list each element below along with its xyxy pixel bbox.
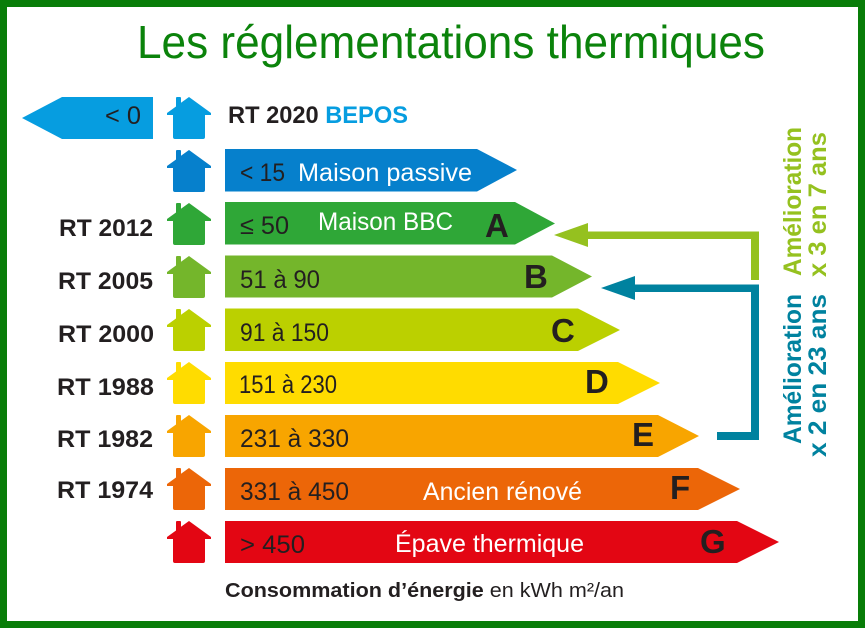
letter E: E [632,416,654,453]
row: class F [57,468,740,510]
value: 151 to 230: 151 à 230 [239,371,337,399]
row: class A [59,202,555,245]
label: RT 2000: RT 2000 [58,321,154,348]
icon: house E [167,415,211,457]
icon: house G [167,521,211,563]
icon: house D [167,362,211,404]
bar: maison passive [225,149,517,192]
text: improvement x3: x 3 en 7 ans [804,132,832,277]
arrow: teal improvement [601,276,759,440]
letter D: D [585,363,609,400]
title: Les réglementations thermiques [137,16,765,68]
value: 51 to 90: 51 à 90 [240,266,320,294]
icon: house RT 2020 [167,97,211,139]
icon: house B [167,256,211,298]
label: RT 2005: RT 2005 [58,268,153,295]
letter G: G [700,523,726,560]
arrow: green improvement [554,223,759,280]
bar: G [225,521,779,563]
icon: house passive [167,150,211,192]
value: above 450: > 450 [240,531,305,559]
label: épave thermique: Épave thermique [395,529,584,558]
label: RT 1988: RT 1988 [57,374,154,401]
arrow: below 0: < 0 [105,102,141,130]
label: RT 2012: RT 2012 [59,215,153,242]
bar: A [225,202,555,244]
label: maison BBC: Maison BBC [318,208,453,236]
bar: F [225,468,740,510]
text: improvement x2: Amélioration [779,294,807,444]
bar: D [225,362,660,404]
bar: E [225,415,699,457]
text: improvement x2: x 2 en 23 ans [804,294,832,457]
label: RT 1974: RT 1974 [57,477,154,504]
label: ancien rénové: Ancien rénové [423,478,582,506]
row: class G [167,521,779,563]
text: improvement x3: Amélioration [779,127,807,276]
row: maison passive [167,149,517,192]
bar: B [225,256,592,298]
icon: house F [167,468,211,510]
letter C: C [551,312,575,349]
row: class C [58,308,620,351]
row: class D [57,362,660,404]
icon: house A [167,203,211,245]
arrow: below 0 [22,97,153,139]
text: improvement x2 [779,294,832,457]
label: RT 2020 BEPOS: RT 2020 BEPOS [228,102,408,129]
letter B: B [524,258,548,295]
value: below 15: < 15 [240,159,285,187]
letter A: A [485,207,509,244]
text: improvement x3 [779,127,832,277]
bar: C [225,308,620,351]
label: maison passive: Maison passive [298,159,472,187]
value: 91 to 150: 91 à 150 [240,319,329,347]
label: RT 1982: RT 1982 [57,426,153,453]
axis caption: Consommation d’énergie en kWh m²/an [225,580,624,602]
icon: house C [167,309,211,351]
letter F: F [670,469,690,506]
row: RT 2020 BEPOS [22,97,408,139]
value: 231 to 330: 231 à 330 [240,425,349,453]
value: 331 to 450: 331 à 450 [240,478,349,506]
value: up to 50: ≤ 50 [240,212,289,240]
row: class E [57,415,699,457]
row: class B [58,256,592,298]
